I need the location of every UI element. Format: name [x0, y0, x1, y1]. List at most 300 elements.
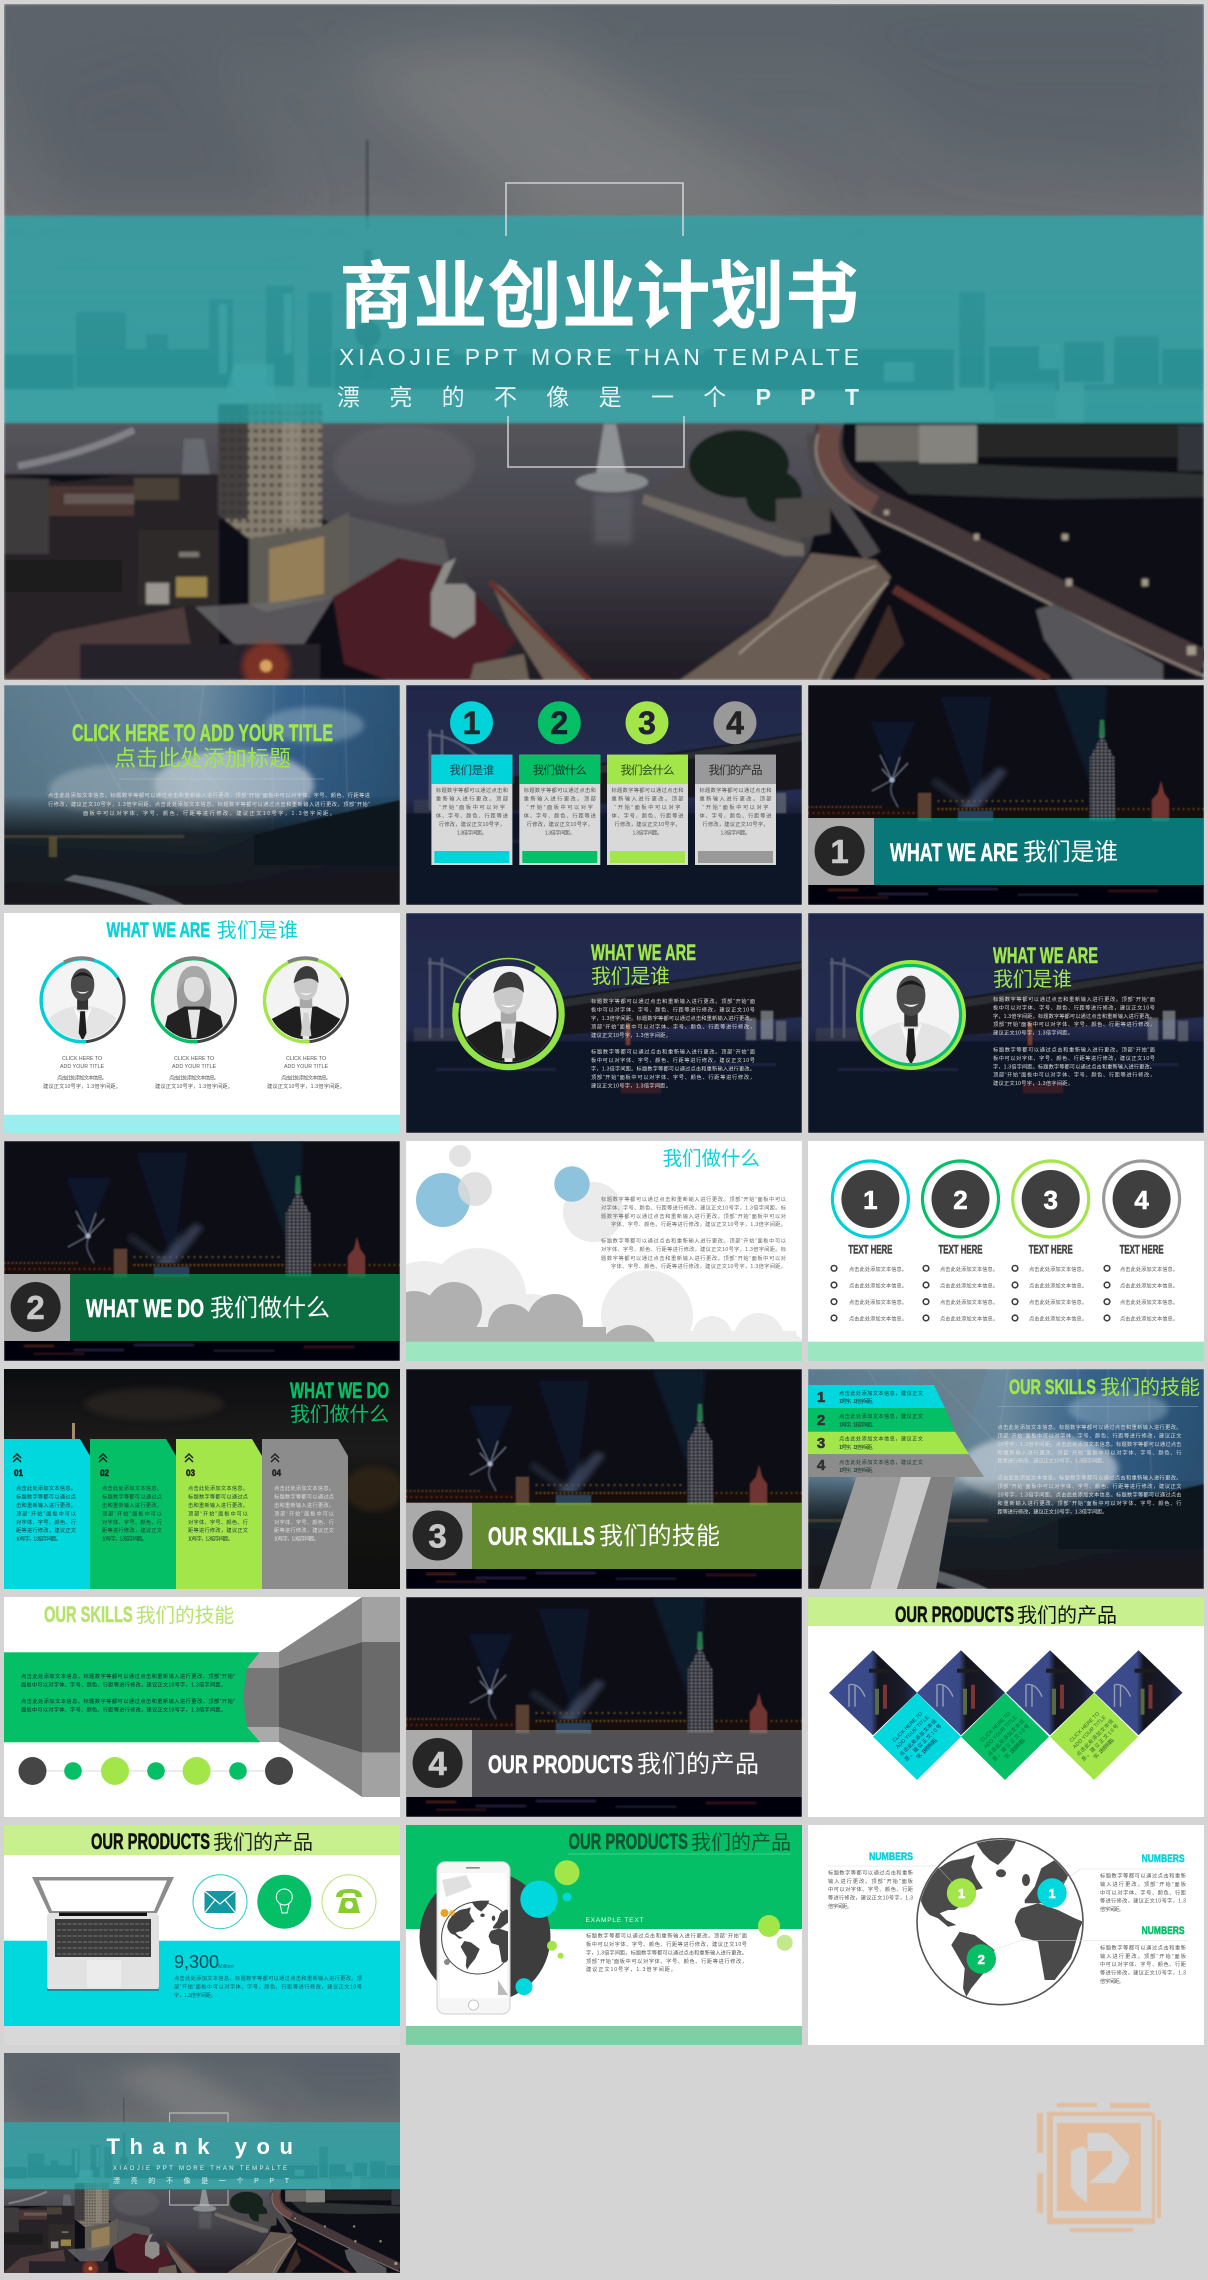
body text: 建议正文10号字，1.3倍字间距。: [591, 1031, 671, 1039]
section title: WHAT WE DO: [86, 1295, 204, 1323]
panel: what we do text with clouds: [406, 1141, 802, 1361]
bar text: 10号字，1.3倍字间距。: [839, 1397, 876, 1405]
ring 4: [1104, 1161, 1180, 1237]
captions: [43, 1056, 345, 1090]
body text: [21, 1672, 235, 1714]
column 3: 标题数字等都可以通过点: [188, 1492, 248, 1500]
card 2: 重新输入进行更改。顶部: [524, 794, 596, 802]
card 4: 我们的产品: [708, 763, 762, 777]
bullet text: 点击此处添加文本信息。: [1120, 1314, 1178, 1322]
footer band: [808, 1342, 1204, 1361]
bullet text: 点击此处添加文本信息。: [940, 1265, 998, 1273]
numbers right top: 输入进行更改。顶部“开始”面板: [1100, 1880, 1187, 1888]
body text: 顶部“开始”面板中可以对字体、字号、颜色、行距等进行修改，: [591, 1022, 755, 1030]
column 2: 02: [100, 1468, 109, 1478]
bullet text: 点击此处添加文本信息。: [849, 1265, 907, 1273]
panel: skills funnel: [4, 1597, 400, 1817]
bubbles: [416, 1145, 623, 1242]
funnel: [243, 1597, 400, 1797]
colored diamond 1: 字，1.3倍字间距。: [914, 1734, 941, 1761]
heading: 我们的产品: [691, 1831, 791, 1854]
colored diamond 3: ADD YOUR TITLE: [1072, 1714, 1108, 1750]
body text: 距等进行修改，建议正文10号字，1.3倍字间距。: [998, 1508, 1108, 1516]
bar numbers: [817, 1389, 826, 1474]
laptop: [32, 1877, 174, 1991]
numbers right bottom: 输入进行更改。顶部“开始”面板: [1100, 1952, 1187, 1960]
pin 2: [1037, 1869, 1188, 1908]
column 1: 01: [14, 1468, 23, 1478]
number block: 4: [428, 1745, 447, 1782]
captions: 点击此处添加文本信息。: [169, 1074, 219, 1082]
column 1: [4, 1439, 90, 1589]
body text: 对字体、字号、颜色、行距等进行修改，建议正文10号字，1.3倍字间距。标: [601, 1204, 786, 1212]
card 2: 我们做什么: [533, 763, 587, 777]
diagonal stripes: [819, 1477, 955, 1589]
column 4: 顶部“开始”面板中可以: [274, 1510, 334, 1518]
captions: ADD YOUR TITLE: [284, 1064, 329, 1070]
body text: 建议正文10号字，1.3倍字间距。: [993, 1028, 1073, 1036]
heading: [290, 1378, 389, 1426]
ring labels: TEXT HERE: [1120, 1242, 1164, 1256]
column 1: 点击此处添加文本信息。: [16, 1484, 76, 1492]
pin 1: [828, 1866, 976, 1908]
colored diamond 3: CLICK HERE TO: [1069, 1711, 1101, 1744]
large dark circle: [420, 1871, 550, 2002]
body text: 板中可以对字体、字号、颜色、行距等进行修改，建议正文10号: [993, 1004, 1155, 1012]
bubbles: [516, 1860, 793, 1995]
body text: 点击此处添加文本信息。标题数字等都可以通过点击和重新输入进行更改。: [998, 1423, 1182, 1431]
body text: 标题数字等都可以通过点击和重新输入进行更改。顶部“开始”面: [591, 997, 755, 1005]
body text: 对字体、字号、颜色、行距等进行修改，建议正文10号字，1.3倍字间距。标: [601, 1245, 786, 1253]
bullet text: 点击此处添加文本信息。: [940, 1298, 998, 1306]
card 2: 标题数字等都可以通过点击和: [524, 786, 596, 794]
phone with globe: [437, 1862, 519, 2014]
column 3: [176, 1439, 262, 1589]
body text: 标题数字等都可以通过点击和重新输入进行更改。顶部“开始”面: [586, 1932, 747, 1940]
column 2: 距等进行修改，建议正文: [102, 1526, 163, 1534]
numbers right bottom: 中可以对字体、字号、颜色、行距: [1100, 1960, 1186, 1968]
globe: [917, 1839, 1083, 2005]
header band: [4, 1825, 400, 1855]
body text: 部“开始”面板中可以对字体、字号、颜色、行距等进行修改，建议正文10号: [174, 1982, 362, 1990]
heading: OUR SKILLS: [1009, 1376, 1096, 1399]
body text: 10号字，1.3倍字间距。点击此处添加文本信息。标题数字等都可以通过点击: [998, 1490, 1182, 1498]
captions: 点击此处添加文本信息。: [281, 1074, 331, 1082]
teal band: [874, 818, 1204, 885]
column 3: 顶部“开始”面板中可以: [188, 1510, 248, 1518]
captions: CLICK HERE TO: [174, 1056, 214, 1062]
panel: profile one: [406, 913, 802, 1133]
icon: envelope: [193, 1875, 247, 1929]
bar text: 10号字，1.3倍字间距。: [839, 1420, 876, 1428]
footer band: [4, 1115, 400, 1133]
section title: 我们的产品: [637, 1751, 759, 1778]
card 2: 1.3倍字间距。: [545, 828, 575, 836]
bullet text: 点击此处添加文本信息。: [1029, 1314, 1087, 1322]
bullet text: 点击此处添加文本信息。: [1029, 1265, 1087, 1273]
column 4: 距等进行修改，建议正文: [274, 1526, 335, 1534]
card 1: 我们是谁: [449, 763, 494, 777]
thank you heading: Thank you: [106, 2134, 293, 2159]
panel: section 1 divider: [808, 685, 1204, 905]
card 2: [519, 755, 600, 865]
body text: 字体、字号、颜色、行距等进行修改，建议正文10号字，1.3倍字间距。: [611, 1262, 786, 1270]
numbers right top: 等进行修改，建议正文10号字，1.3: [1100, 1896, 1186, 1904]
section title: 我们做什么: [210, 1295, 330, 1322]
numbers left: 中可以对字体、字号、颜色、行距: [828, 1885, 913, 1893]
bullet text: [849, 1265, 1178, 1322]
colored diamond 3: 点击此处添加文本信: [1074, 1717, 1115, 1758]
chinese subtitle: 漂亮的不像是一个 PPT: [337, 384, 859, 410]
bullet text: 点击此处添加文本信息。: [849, 1298, 907, 1306]
card 1: “开始”面板中可以对字: [439, 803, 505, 811]
card 3: 重新输入进行更改。顶部: [612, 794, 684, 802]
card 4: 行修改，建议正文10号字，: [702, 820, 768, 828]
numbers right bottom: 倍字间距。: [1100, 1977, 1124, 1985]
stat number: 9,300: [174, 1952, 219, 1972]
section title: WHAT WE ARE: [890, 839, 1018, 867]
stacked bars: [808, 1385, 984, 1477]
heading: 我们是谁: [591, 965, 670, 988]
header band: OUR PRODUCTS: [895, 1602, 1014, 1627]
body text: 面板中可以对字体、字号、颜色、行距等进行修改，建议正文10号字，1.3倍字间距。: [21, 1680, 226, 1688]
body text: 建议正文10号字，1.3倍字间距。: [591, 1082, 671, 1090]
card 2: 体、字号、颜色、行距等进: [524, 812, 596, 820]
ring 2: [922, 1161, 998, 1237]
numbers left: 标题数字等都可以通过点击和重新: [828, 1868, 913, 1876]
panel: section 2 divider: [4, 1141, 400, 1361]
number block: [808, 818, 874, 885]
body text: 点击此处添加文本信息。标题数字等都可以通过点击和重新输入进行更改。顶部“开始”: [21, 1672, 235, 1680]
heading: [993, 943, 1098, 991]
ring 4: 4: [1134, 1185, 1149, 1215]
ring labels: TEXT HERE: [938, 1242, 982, 1256]
panel: click here title slide: [4, 685, 400, 905]
column 2: 点击此处添加文本信息。: [102, 1484, 162, 1492]
captions: 建议正文10号字，1.3倍字间距。: [43, 1082, 121, 1090]
heading: 我们是谁: [993, 968, 1072, 991]
number block: 2: [26, 1289, 45, 1326]
body text: 10号字，1.3倍字间距。点击此处添加文本信息。标题数字等都可以通过点击: [998, 1440, 1182, 1448]
body text: 字，1.3倍字间距。: [174, 1991, 216, 1999]
captions: 点击此处添加文本信息。: [57, 1074, 107, 1082]
number block: 1: [830, 833, 849, 870]
bar numbers: 2: [817, 1412, 825, 1429]
colored diamond 1: ADD YOUR TITLE: [895, 1714, 931, 1750]
icon: telephone: [322, 1875, 376, 1929]
body text: 顶部“开始”面板中可以对字体、字号、颜色、行距等进行修改，建议正文: [998, 1482, 1182, 1490]
bullets: [831, 1266, 1110, 1321]
column 2: 标题数字等都可以通过点: [102, 1492, 162, 1500]
column 3: 点击此处添加文本信息。: [188, 1484, 248, 1492]
portrait with ring: [436, 942, 581, 1086]
body text: 标题数字等都可以通过点击和重新输入进行更改。顶部“开始”面板中可以: [601, 1236, 786, 1244]
card 1: [431, 755, 512, 865]
body text: 距等进行修改，建议正文10号字，1.3倍字间距。: [998, 1456, 1108, 1464]
body text: 面板中可以对字体、字号、颜色、行距等进行修改，建议正文10号字，1.3倍字间距。: [21, 1706, 226, 1714]
cyan block: [4, 1941, 400, 2026]
section title: [86, 1295, 330, 1323]
column 4: 击和重新输入进行更改。: [274, 1501, 334, 1509]
number block: [406, 1503, 472, 1569]
colored diamond 2: 字，1.3倍字间距。: [1002, 1734, 1029, 1761]
numbers right top: 标题数字等都可以通过点击和重新: [1100, 1872, 1186, 1880]
body text: 字，1.3倍字间距。标题数字等都可以通过点击和重新输入进行更改。: [591, 1064, 755, 1072]
body text: 字，1.3倍字间距。标题数字等都可以通过点击和重新输入进行更改。: [993, 1012, 1155, 1020]
lime band: [472, 1503, 802, 1569]
colored diamond 3: 字，1.3倍字间距。: [1091, 1734, 1118, 1761]
pin 1: 1: [958, 1886, 965, 1901]
column 2: [90, 1439, 176, 1589]
portrait 3: [261, 955, 351, 1045]
dot timeline: [18, 1757, 293, 1785]
numbers right top: 中可以对字体、字号、颜色、行距: [1100, 1888, 1186, 1896]
panel: laptop and icons: [4, 1825, 400, 2026]
body text: 建议正文10号字，1.3倍字间距。: [586, 1965, 676, 1973]
body text: 题数字等都可以通过点击和重新输入进行更改。顶部“开始”面板中可以对: [601, 1254, 786, 1262]
heading: 我们做什么: [662, 1148, 760, 1170]
heading: WHAT WE ARE: [993, 943, 1098, 968]
ring 3: 3: [1043, 1185, 1058, 1215]
header band: 我们的产品: [1017, 1604, 1117, 1627]
colored diamond 3: [1050, 1693, 1138, 1780]
column 1: 距等进行修改，建议正文: [16, 1526, 77, 1534]
card 4: 体、字号、颜色、行距等进: [700, 812, 772, 820]
number block: [4, 1274, 70, 1341]
column 3: 03: [186, 1468, 195, 1478]
body text: 标题数字等都可以通过点击和重新输入进行更改。顶部“开始”面: [993, 995, 1155, 1003]
photo diamonds: [829, 1650, 1182, 1736]
card 1: 重新输入进行更改。顶部: [436, 794, 508, 802]
column 4: 10号字，1.3倍字间距。: [274, 1534, 319, 1542]
english subtitle: XIAOJIE PPT MORE THAN TEMPALTE: [113, 2166, 287, 2172]
section title: OUR SKILLS: [488, 1523, 595, 1551]
captions: 建议正文10号字，1.3倍字间距。: [155, 1082, 233, 1090]
body text: 行修改，建议正文10号字，1.3倍字间距。点击此处添加文本信息。标题数字等都可以通过点击和重新输入进行更改，顶部“开始”: [48, 800, 370, 808]
captions: CLICK HERE TO: [286, 1056, 326, 1062]
captions: ADD YOUR TITLE: [172, 1064, 217, 1070]
colored diamond 1: 点击此处添加文本信: [897, 1717, 938, 1758]
body text: 标题数字等都可以通过点击和重新输入进行更改。顶部“开始”面: [591, 1048, 755, 1056]
pin 2: 1: [1048, 1886, 1056, 1901]
bar text: [839, 1389, 924, 1474]
panel: profile two: [808, 913, 1204, 1133]
body text: 点击此处添加文本信息。标题数字等都可以通过点击和重新输入进行更改。: [998, 1474, 1182, 1482]
green band: [70, 1274, 400, 1341]
captions: CLICK HERE TO: [62, 1056, 102, 1062]
panel: world map: [808, 1825, 1204, 2045]
section title: 我们的技能: [599, 1523, 720, 1550]
column 4: [262, 1439, 348, 1589]
pin 3: 2: [978, 1952, 985, 1967]
column 1: 标题数字等都可以通过点: [16, 1492, 76, 1500]
heading: 我们做什么: [290, 1404, 389, 1426]
body text: 点击此处添加文本信息。标题数字等都可以通过点击和重新输入进行更改，顶部“开始”面板中可以对字体、字号、颜色、行距等进: [48, 791, 370, 799]
numbers right bottom: 标题数字等都可以通过点击和重新: [1100, 1944, 1186, 1952]
body text: [586, 1932, 747, 1973]
green block: [4, 1652, 260, 1742]
panel: four topic cards: [406, 685, 802, 905]
card 3: 体、字号、颜色、行距等进: [612, 812, 684, 820]
colored diamond 2: 息。建议正文10号: [990, 1722, 1031, 1763]
card 1: 行修改，建议正文10号字，: [439, 820, 505, 828]
card 1: 1.3倍字间距。: [457, 828, 487, 836]
bar text: 10号字，1.3倍字间距。: [839, 1466, 876, 1474]
column 4: 点击此处添加文本信息。: [274, 1484, 334, 1492]
panel: team of three: [4, 913, 400, 1133]
heading: [1009, 1376, 1200, 1399]
bar text: 点击此处添加文本信息，建议正文: [839, 1412, 924, 1420]
bullet text: 点击此处添加文本信息。: [1029, 1282, 1087, 1290]
ring labels: [848, 1242, 1164, 1256]
body text: 顶部“开始”面板中可以对字体、字号、颜色、行距等进行修改，建议正文: [998, 1432, 1182, 1440]
body text: 标题数字等都可以通过点击和重新输入进行更改。顶部“开始”面板中可以: [601, 1195, 786, 1203]
heading chinese: 点击此处添加标题: [114, 746, 291, 771]
portrait 2: [149, 955, 239, 1045]
numbers left: 倍字间距。: [828, 1902, 852, 1910]
body text: 和重新输入进行更改。顶部“开始”面板中可以对字体、字号、颜色、行: [998, 1499, 1182, 1507]
body text: [174, 1974, 362, 1999]
body text: [998, 1423, 1182, 1516]
heading: OUR PRODUCTS: [568, 1829, 688, 1854]
portrait 1: [38, 955, 128, 1045]
panel: diamond products: [808, 1597, 1204, 1817]
bar text: 10号字，1.3倍字间距。: [839, 1443, 876, 1451]
bar numbers: 1: [817, 1389, 825, 1406]
body text: 标题数字等都可以通过点击和重新输入进行更改。顶部“开始”面: [993, 1046, 1155, 1054]
body text: [601, 1195, 786, 1270]
body text: 点击此处添加文本信息。标题数字等都可以通过点击和重新输入进行更改。顶: [174, 1974, 362, 1982]
number circles: [450, 701, 756, 744]
card 3: 标题数字等都可以通过点击和: [612, 786, 684, 794]
bar text: 点击此处添加文本信息，建议正文: [839, 1389, 924, 1397]
body text: 板中可以对字体、字号、颜色、行距等进行修改，建议正文10号: [586, 1940, 747, 1948]
body text: 点击此处添加文本信息。标题数字等都可以通过点击和重新输入进行更改。顶部“开始”: [21, 1697, 235, 1705]
section title: [488, 1523, 720, 1551]
column 1: 顶部“开始”面板中可以: [16, 1510, 76, 1518]
card 4: 1.3倍字间距。: [720, 828, 750, 836]
heading: [591, 940, 696, 988]
card 4: 标题数字等都可以通过点击和: [700, 786, 772, 794]
number circles: 1: [463, 705, 480, 741]
body text: 板中可以对字体、字号、颜色、行距等进行修改，建议正文10号: [591, 1056, 755, 1064]
chinese subtitle: 漂亮的不像是一个PPT: [113, 2176, 290, 2185]
column 1: 击和重新输入进行更改。: [16, 1501, 76, 1509]
card 2: 行修改，建议正文10号字，: [527, 820, 593, 828]
header band: [808, 1597, 1204, 1627]
body text: 板中可以对字体、字号、颜色、行距等进行修改，建议正文10号: [993, 1054, 1155, 1062]
colored diamond 1: [873, 1693, 961, 1780]
outline frame top: [506, 183, 683, 236]
footer band: [406, 1342, 802, 1361]
panel: four numbered rings: [808, 1141, 1204, 1361]
card 4: “开始”面板中可以对字: [702, 803, 768, 811]
captions: ADD YOUR TITLE: [60, 1064, 105, 1070]
bullet text: 点击此处添加文本信息。: [849, 1314, 907, 1322]
numbers right bottom: NUMBERS: [1142, 1925, 1185, 1937]
logo watermark: [1037, 2103, 1161, 2232]
column 2: 对字体、字号、颜色、行: [102, 1518, 162, 1526]
number circles: 2: [550, 705, 568, 741]
bullet text: 点击此处添加文本信息。: [1120, 1265, 1178, 1273]
green block: [406, 1825, 802, 1929]
panel: section 3 divider: [406, 1369, 802, 1589]
body text: 字，1.3倍字间距。标题数字等都可以通过点击和重新输入进行更改。: [586, 1948, 747, 1956]
numbers right bottom: 等进行修改，建议正文10号字，1.3: [1100, 1968, 1186, 1976]
section title: OUR PRODUCTS: [488, 1751, 633, 1779]
body text: 顶部“开始”面板中可以对字体、字号、颜色、行距等进行修改，: [591, 1073, 755, 1081]
panel: thank you slide: [4, 2053, 400, 2273]
column 2: 顶部“开始”面板中可以: [102, 1510, 162, 1518]
main title slide: [4, 4, 1204, 680]
colored diamond 2: 点击此处添加文本信: [985, 1717, 1026, 1758]
card 1: 标题数字等都可以通过点击和: [436, 786, 508, 794]
number block: [406, 1730, 472, 1797]
number block: 3: [428, 1518, 447, 1554]
card 4: 重新输入进行更改。顶部: [700, 794, 772, 802]
clouds: [379, 1248, 806, 1385]
bullet text: 点击此处添加文本信息。: [849, 1282, 907, 1290]
column 4: 标题数字等都可以通过点: [274, 1492, 334, 1500]
body text: 板中可以对字体、字号、颜色、行距等进行修改，建议正文10号: [591, 1006, 755, 1014]
body text: 顶部“开始”面板中可以对字体、字号、颜色、行距等进行修改，: [586, 1957, 747, 1965]
numbers left: NUMBERS: [869, 1851, 913, 1863]
card 3: 我们会什么: [620, 763, 674, 777]
colored diamond 1: 息。建议正文10号: [902, 1722, 943, 1763]
bullet text: 点击此处添加文本信息。: [940, 1282, 998, 1290]
heading: 我们是谁: [217, 919, 298, 942]
portrait with ring: [858, 962, 964, 1068]
heading: 我们的技能: [136, 1605, 234, 1627]
card 3: [607, 755, 688, 865]
heading: 我们的技能: [1100, 1376, 1200, 1399]
column 4: 04: [272, 1468, 281, 1478]
panel: section 4 divider: [406, 1597, 802, 1817]
card 3: “开始”面板中可以对字: [614, 803, 680, 811]
bar text: 点击此处添加文本信息，建议正文: [839, 1458, 924, 1466]
body text: [591, 997, 755, 1090]
card 2: “开始”面板中可以对字: [527, 803, 593, 811]
outline frame bottom: [508, 416, 684, 467]
colored diamond 1: CLICK HERE TO: [892, 1711, 924, 1744]
card 3: 行修改，建议正文10号字，: [614, 820, 680, 828]
example text label: EXAMPLE TEXT: [586, 1917, 644, 1924]
body text: 建议正文10号字，1.3倍字间距。: [993, 1079, 1073, 1087]
column 1: 10号字，1.3倍字间距。: [16, 1534, 61, 1542]
bullet text: 点击此处添加文本信息。: [940, 1314, 998, 1322]
card 4: [695, 755, 776, 865]
outline frame: [170, 2113, 228, 2205]
numbers right top: 倍字间距。: [1100, 1905, 1124, 1913]
number circles: 3: [638, 705, 656, 741]
body text: 顶部“开始”面板中可以对字体、字号、颜色、行距等进行修改，: [993, 1070, 1155, 1078]
ring 1: [832, 1161, 908, 1237]
column 4: 对字体、字号、颜色、行: [274, 1518, 334, 1526]
column 2: 击和重新输入进行更改。: [102, 1501, 162, 1509]
colored diamond 2: ADD YOUR TITLE: [983, 1714, 1019, 1750]
bar numbers: 4: [817, 1457, 826, 1474]
header band: OUR PRODUCTS: [91, 1829, 210, 1854]
bar text: 点击此处添加文本信息，建议正文: [839, 1434, 924, 1442]
panel: phone and bubbles: [406, 1825, 802, 2045]
body text: 字，1.3倍字间距。标题数字等都可以通过点击和重新输入进行更改。: [993, 1062, 1155, 1070]
body text: 面板中可以对字体、字号、颜色、行距等进行修改，建议正文10号字，1.3倍字间距。: [83, 809, 335, 817]
column 2: 10号字，1.3倍字间距。: [102, 1534, 147, 1542]
colored diamond 3: 息。建议正文10号: [1079, 1722, 1120, 1763]
bullet text: 点击此处添加文本信息。: [1120, 1282, 1178, 1290]
gray band: [472, 1730, 802, 1797]
city photo with teal band: [4, 4, 1204, 690]
